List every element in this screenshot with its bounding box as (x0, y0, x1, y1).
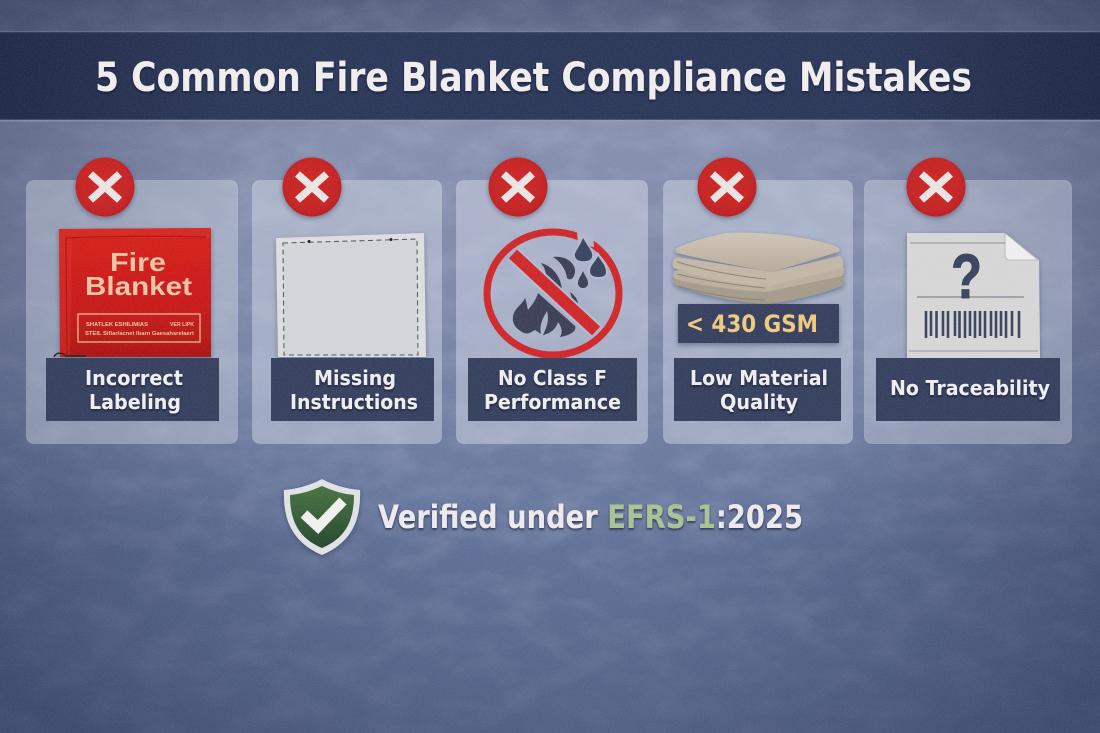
label bar: No Class F (498, 366, 607, 390)
verification badge (284, 479, 803, 555)
label bar: Instructions (290, 390, 418, 414)
label bar: Incorrect (85, 366, 183, 390)
x badge (488, 158, 548, 216)
label bar: Labeling (89, 390, 181, 414)
panel: low material quality (664, 158, 852, 444)
icon: label with question mark and barcode: ? (951, 242, 982, 312)
label bar: No Traceability (890, 376, 1050, 400)
icon: red fire blanket pouch: Blanket (85, 271, 192, 301)
label bar (876, 358, 1060, 421)
label bar: Low Material (690, 366, 828, 390)
icon: prohibited fire and water (487, 231, 619, 355)
icon: red fire blanket pouch: Fire (110, 247, 166, 277)
x badge (698, 158, 756, 216)
panel: incorrect labeling (26, 158, 238, 444)
x badge (282, 158, 342, 216)
label bar (674, 358, 841, 421)
icon: red fire blanket pouch: SHATLEK ESHILIMIAS (86, 322, 148, 328)
icon: green shield (284, 479, 360, 555)
icon: stack of folded blankets (673, 233, 844, 304)
panel: no class f performance (456, 158, 648, 444)
panel: missing instructions (252, 158, 442, 444)
icon: red fire blanket pouch: VER LIPK (170, 322, 194, 328)
label bar (468, 358, 637, 421)
x badge (76, 158, 134, 216)
panel: no traceability (864, 158, 1072, 444)
label bar (271, 358, 434, 421)
icon: label with question mark and barcode (907, 233, 1040, 358)
label bar (46, 358, 219, 421)
gsm tag: < 430 GSM (686, 310, 818, 338)
x badge (906, 158, 966, 216)
gsm tag (678, 304, 839, 343)
header band (0, 31, 1100, 122)
label bar: Performance (484, 390, 621, 414)
icon: red fire blanket pouch: STEIL Sifiar/acnet Ibarn Gaesahsrelaert (85, 331, 194, 337)
title: 5 Common Fire Blanket Compliance Mistakes (95, 55, 972, 101)
verification text: Verified under EFRS-1:2025 (378, 498, 803, 536)
icon: red fire blanket pouch (54, 228, 211, 357)
label bar: Missing (314, 366, 396, 390)
icon: blank label sheet (276, 233, 426, 357)
label bar: Quality (720, 390, 798, 414)
